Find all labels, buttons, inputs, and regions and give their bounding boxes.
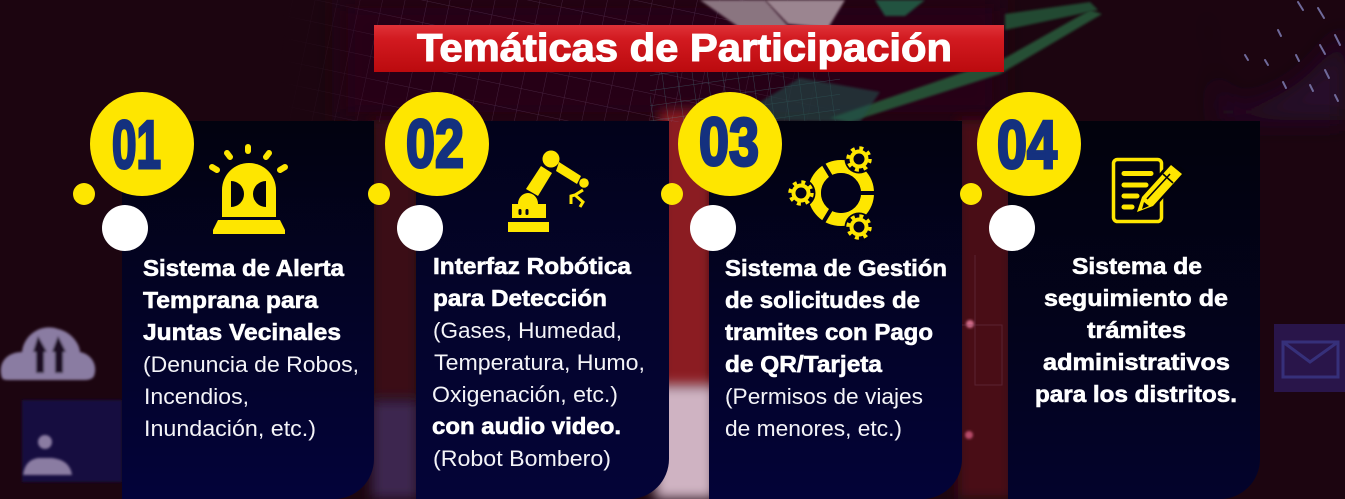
white dot 03 bbox=[690, 205, 736, 251]
text: tema 02 bbox=[432, 253, 645, 471]
number badge 04: 04 bbox=[997, 107, 1057, 183]
text: tema 01 bbox=[143, 255, 359, 441]
text: tema 01: Temprana para bbox=[143, 287, 318, 313]
text: tema 01: Incendios, bbox=[144, 384, 249, 409]
white dot 04 bbox=[989, 205, 1035, 251]
text: tema 03: tramites con Pago bbox=[725, 319, 933, 345]
text: tema 02: Oxigenación, etc.) bbox=[432, 382, 618, 407]
text: tema 04: administrativos bbox=[1043, 349, 1230, 375]
text: tema 03: de solicitudes de bbox=[725, 287, 920, 313]
yellow dot 01 bbox=[73, 183, 95, 205]
yellow dot 02 bbox=[368, 183, 390, 205]
text: tema 01: Juntas Vecinales bbox=[143, 319, 341, 345]
text: tema 04: para los distritos. bbox=[1035, 381, 1237, 407]
icon: background cloud bbox=[1, 327, 95, 380]
text: tema 04 bbox=[1035, 253, 1237, 407]
number badge 01 bbox=[90, 92, 194, 196]
white dot 02 bbox=[397, 205, 443, 251]
title: Temáticas de Participación bbox=[417, 27, 952, 70]
icon: robotic arm bbox=[508, 150, 589, 232]
panel: tema 02 bbox=[368, 92, 669, 499]
icon: document and pencil bbox=[1114, 160, 1183, 222]
white dot 01 bbox=[102, 205, 148, 251]
text: tema 02: con audio video. bbox=[432, 413, 621, 439]
panel: tema 03 bbox=[661, 92, 962, 499]
icon: alarm beacon bbox=[212, 147, 285, 234]
text: tema 02: para Detección bbox=[433, 285, 607, 311]
text: tema 03: (Permisos de viajes bbox=[725, 384, 923, 409]
icon: gears ring bbox=[786, 144, 880, 242]
number badge 02 bbox=[385, 92, 489, 196]
text: tema 02: Temperatura, Humo, bbox=[434, 350, 645, 375]
text: tema 01: Sistema de Alerta bbox=[143, 255, 344, 281]
text: tema 03: de menores, etc.) bbox=[725, 416, 902, 441]
text: tema 04: Sistema de bbox=[1072, 253, 1202, 279]
yellow dot 04 bbox=[960, 183, 982, 205]
text: tema 02: (Robot Bombero) bbox=[433, 446, 611, 471]
text: tema 02: Interfaz Robótica bbox=[433, 253, 631, 279]
text: tema 04: seguimiento de bbox=[1044, 285, 1228, 311]
icon: background person bbox=[22, 400, 122, 482]
icon: background envelope bbox=[1274, 324, 1345, 392]
text: tema 03: de QR/Tarjeta bbox=[725, 351, 882, 377]
title banner bbox=[374, 25, 1004, 72]
panel: tema 04 bbox=[960, 92, 1260, 499]
yellow dot 03 bbox=[661, 183, 683, 205]
text: tema 04: trámites bbox=[1087, 317, 1186, 343]
number badge 03: 03 bbox=[699, 104, 759, 180]
text: tema 01: Inundación, etc.) bbox=[144, 416, 316, 441]
number badge 01: 01 bbox=[112, 107, 161, 183]
text: tema 02: (Gases, Humedad, bbox=[433, 318, 622, 343]
text: tema 01: (Denuncia de Robos, bbox=[143, 352, 359, 377]
background: dark technology collage bbox=[308, 0, 1345, 499]
panel: tema 01 bbox=[73, 92, 374, 499]
text: tema 03: Sistema de Gestión bbox=[725, 255, 947, 281]
text: tema 03 bbox=[725, 255, 947, 441]
number badge 02: 02 bbox=[406, 106, 464, 182]
number badge 03 bbox=[678, 92, 782, 196]
number badge 04 bbox=[977, 92, 1081, 196]
